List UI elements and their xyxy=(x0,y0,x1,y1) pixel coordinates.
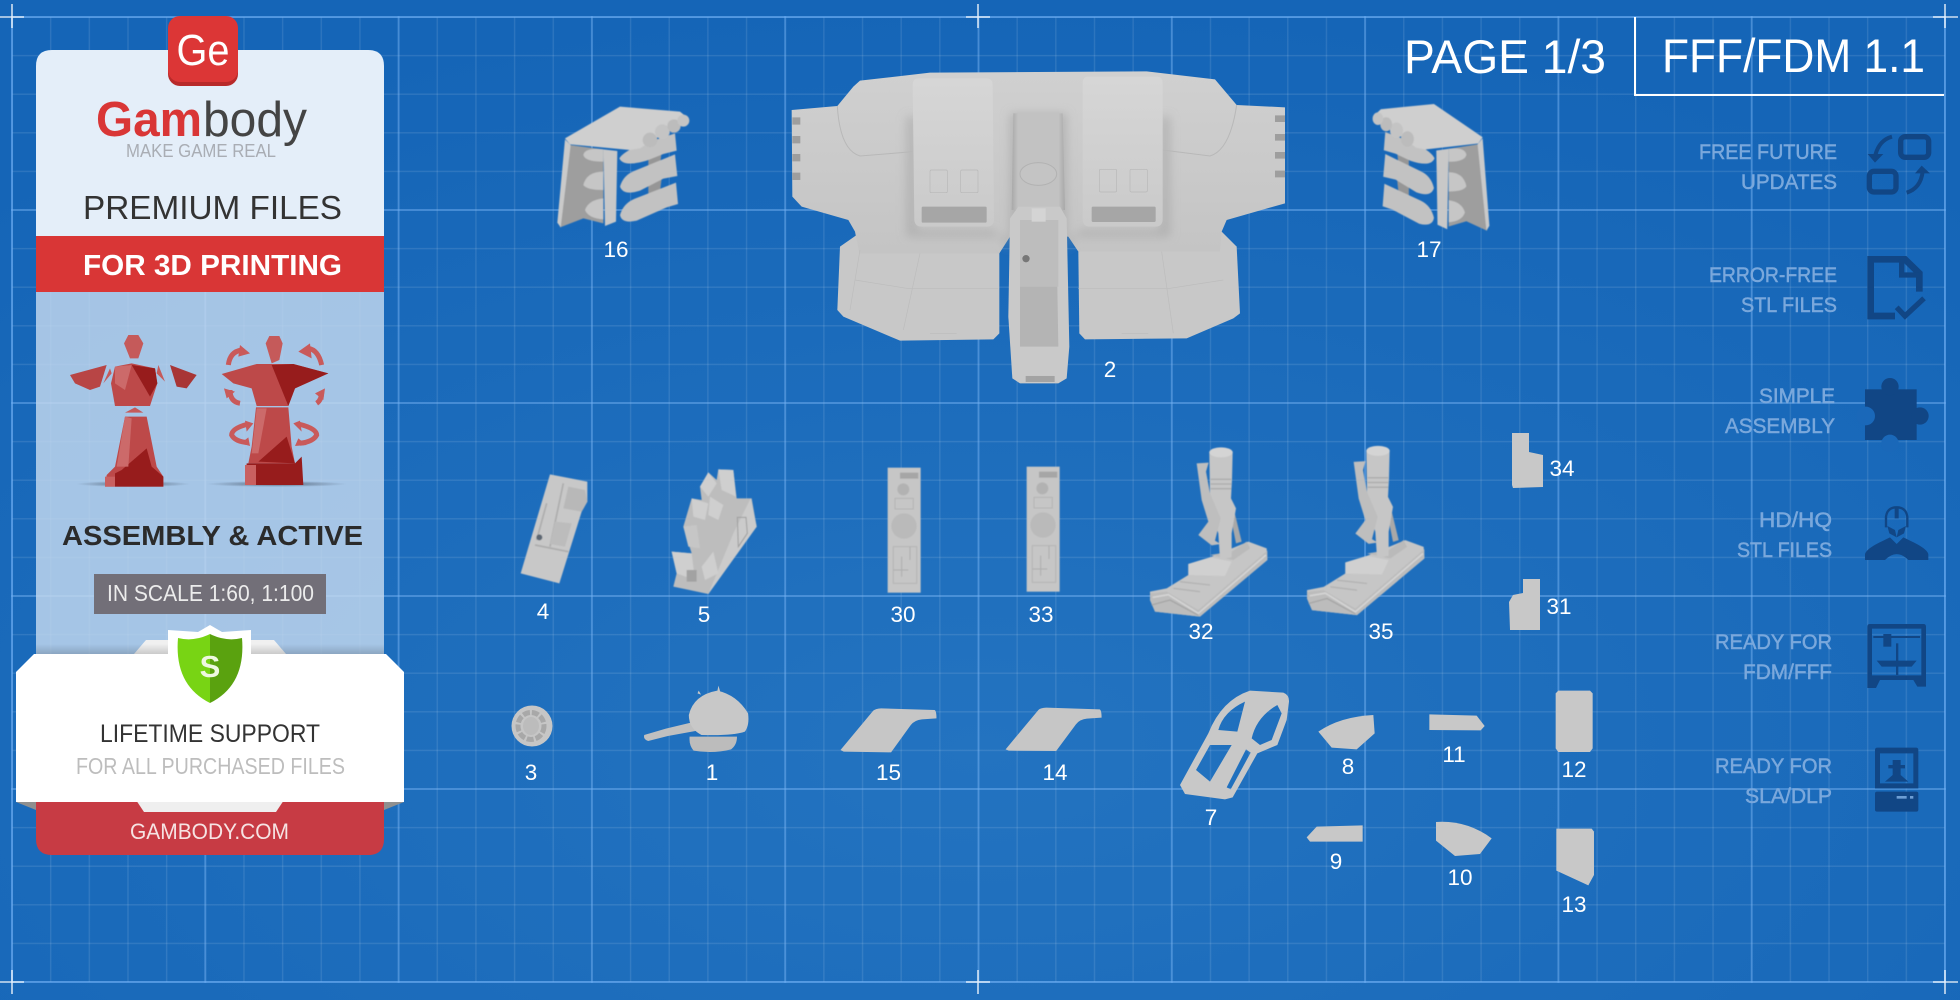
feature: free future updates: UPDATES xyxy=(1741,170,1837,194)
heading: assembly and active: ASSEMBLY & ACTIVE xyxy=(62,520,363,551)
icon: green shield: S xyxy=(200,649,220,684)
part 34: bracket xyxy=(1512,433,1543,488)
part 32: pilot stand xyxy=(1150,447,1267,617)
part 15: cover xyxy=(840,708,936,752)
hull soft shadows xyxy=(907,113,1170,250)
feature: ready for FDM/FFF: FDM/FFF xyxy=(1743,660,1832,684)
part 5: cockpit interior xyxy=(672,469,757,594)
feature: free future updates xyxy=(1699,137,1930,194)
wordmark: body: body xyxy=(203,93,307,147)
figure: disassembled statue xyxy=(70,335,197,487)
banner: for 3D printing xyxy=(36,236,384,292)
tagline: MAKE GAME REAL xyxy=(126,141,276,161)
lower left wing xyxy=(837,235,999,341)
label: 8: 8 xyxy=(1342,754,1354,779)
page tag: FFF/FDM 1.1 xyxy=(1662,29,1925,82)
part 1: turret xyxy=(644,686,748,752)
label: 14: 14 xyxy=(1042,760,1068,785)
part 17: rocket pod mirrored xyxy=(1373,104,1489,231)
part 9: glass xyxy=(1307,825,1363,842)
feature: simple assembly: ASSEMBLY xyxy=(1725,414,1835,438)
label: 10: 10 xyxy=(1447,865,1473,890)
features list xyxy=(1699,137,1930,812)
figure: assembled statue with arrows xyxy=(207,336,347,487)
feature: ready for SLA/DLP xyxy=(1715,748,1918,812)
label: 34: 34 xyxy=(1549,456,1575,481)
scale badge xyxy=(94,574,326,614)
fins right xyxy=(1275,115,1285,177)
part 14: cover xyxy=(1006,708,1102,751)
text: website: GAMBODY.COM xyxy=(130,819,289,844)
label: 4: 4 xyxy=(537,599,549,624)
feature: simple assembly xyxy=(1725,378,1929,452)
label: 15: 15 xyxy=(876,760,901,785)
label: 16: 16 xyxy=(603,237,629,262)
label: 3: 3 xyxy=(525,760,537,785)
label: 11: 11 xyxy=(1442,742,1466,767)
label: 35: 35 xyxy=(1368,619,1394,644)
upper hull xyxy=(792,71,1285,253)
text: lifetime support: LIFETIME SUPPORT xyxy=(100,720,320,748)
part 3: round hatch xyxy=(512,706,552,746)
label: 31: 31 xyxy=(1546,594,1572,619)
label: 33: 33 xyxy=(1028,602,1054,627)
feature: ready for SLA/DLP: SLA/DLP xyxy=(1745,784,1832,808)
part 30: console panel xyxy=(888,468,921,593)
feature: error-free stl files: STL FILES xyxy=(1741,293,1837,317)
part 10: glass xyxy=(1436,822,1492,856)
part 2: main hull xyxy=(792,71,1285,383)
logo badge: Ge: Ge xyxy=(176,26,230,75)
label: 13: 13 xyxy=(1561,892,1587,917)
wordmark: Gambody: Gam xyxy=(96,93,202,147)
panel: Gambody sidebar xyxy=(16,16,404,855)
icon: green shield xyxy=(168,625,251,716)
page tag: PAGE 1/3 xyxy=(1404,30,1606,83)
text: for all purchased files: FOR ALL PURCHASED FILES xyxy=(76,753,345,779)
label: 5: 5 xyxy=(698,602,710,627)
part 13: glass xyxy=(1556,829,1594,885)
part 11: glass xyxy=(1429,714,1485,730)
part 12: glass xyxy=(1556,691,1593,752)
part 4: side panel xyxy=(521,474,587,583)
feature: error-free stl files xyxy=(1709,259,1924,317)
label: 1: 1 xyxy=(706,760,718,785)
label: 17: 17 xyxy=(1416,237,1442,262)
feature: HD/HQ stl files: HD/HQ xyxy=(1759,508,1832,532)
part 8: glass xyxy=(1318,715,1375,749)
label: 2: 2 xyxy=(1104,357,1116,382)
feature: HD/HQ stl files: STL FILES xyxy=(1737,538,1832,562)
part 7: canopy frame xyxy=(1180,691,1289,799)
dorsal spine xyxy=(1012,113,1065,210)
cockpit channel xyxy=(1008,207,1069,383)
part 31: bracket xyxy=(1509,579,1540,630)
feature: ready for FDM/FFF: READY FOR xyxy=(1715,630,1832,654)
feature: free future updates: FREE FUTURE xyxy=(1699,140,1837,164)
feature: HD/HQ stl files xyxy=(1737,507,1928,562)
heading: premium files: PREMIUM FILES xyxy=(83,189,342,226)
wing panel lines xyxy=(850,250,1223,333)
left intake xyxy=(913,78,994,227)
logo badge: Ge xyxy=(168,16,238,86)
fins left xyxy=(792,117,800,180)
feature: simple assembly: SIMPLE xyxy=(1759,384,1835,408)
glass and frame group xyxy=(1180,691,1594,885)
label: 12: 12 xyxy=(1561,757,1587,782)
scale badge: IN SCALE 1:60, 1:100 xyxy=(107,580,314,606)
part 33: console panel xyxy=(1027,467,1060,592)
right intake xyxy=(1083,77,1163,227)
part 16: rocket pod xyxy=(557,107,689,227)
label: 9: 9 xyxy=(1330,849,1342,874)
part 35: pilot stand xyxy=(1307,446,1424,615)
label: 7: 7 xyxy=(1205,805,1217,830)
feature: ready for SLA/DLP: READY FOR xyxy=(1715,754,1832,778)
label: 32: 32 xyxy=(1188,619,1214,644)
shoulder lines xyxy=(837,105,1237,156)
support ribbon xyxy=(16,640,404,855)
feature: error-free stl files: ERROR-FREE xyxy=(1709,263,1837,287)
feature: ready for FDM/FFF xyxy=(1715,624,1926,688)
panel background: translucent xyxy=(36,280,384,660)
panel top: logo area xyxy=(36,50,384,240)
label: 30: 30 xyxy=(890,602,916,627)
banner: for 3D printing: FOR 3D PRINTING xyxy=(83,250,342,282)
page tag xyxy=(1404,17,1944,95)
lower right wing xyxy=(1078,232,1240,339)
